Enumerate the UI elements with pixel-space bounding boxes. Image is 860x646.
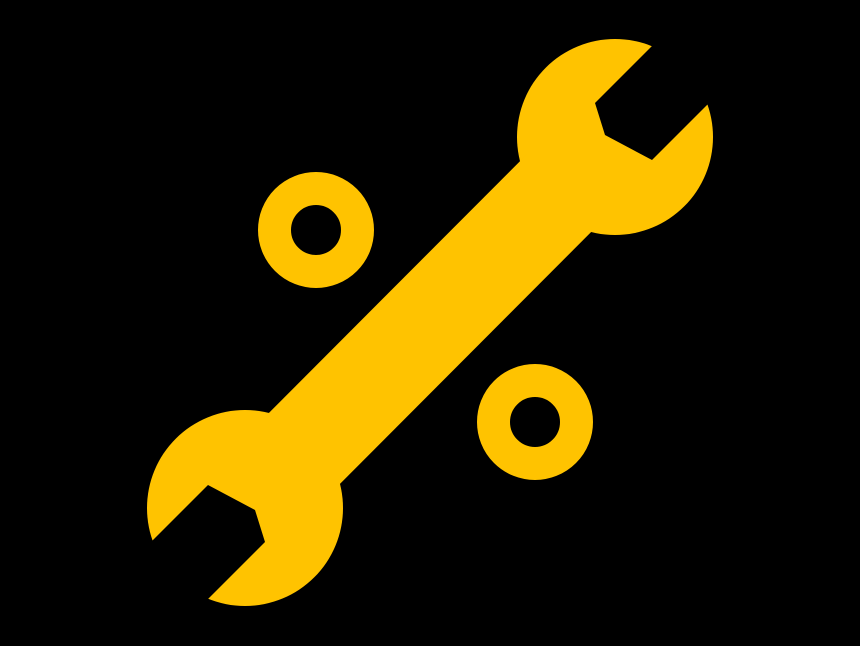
icon: lower circle — [494, 380, 576, 464]
icon: upper circle — [274, 188, 358, 272]
icon: wrench — [108, 3, 752, 642]
